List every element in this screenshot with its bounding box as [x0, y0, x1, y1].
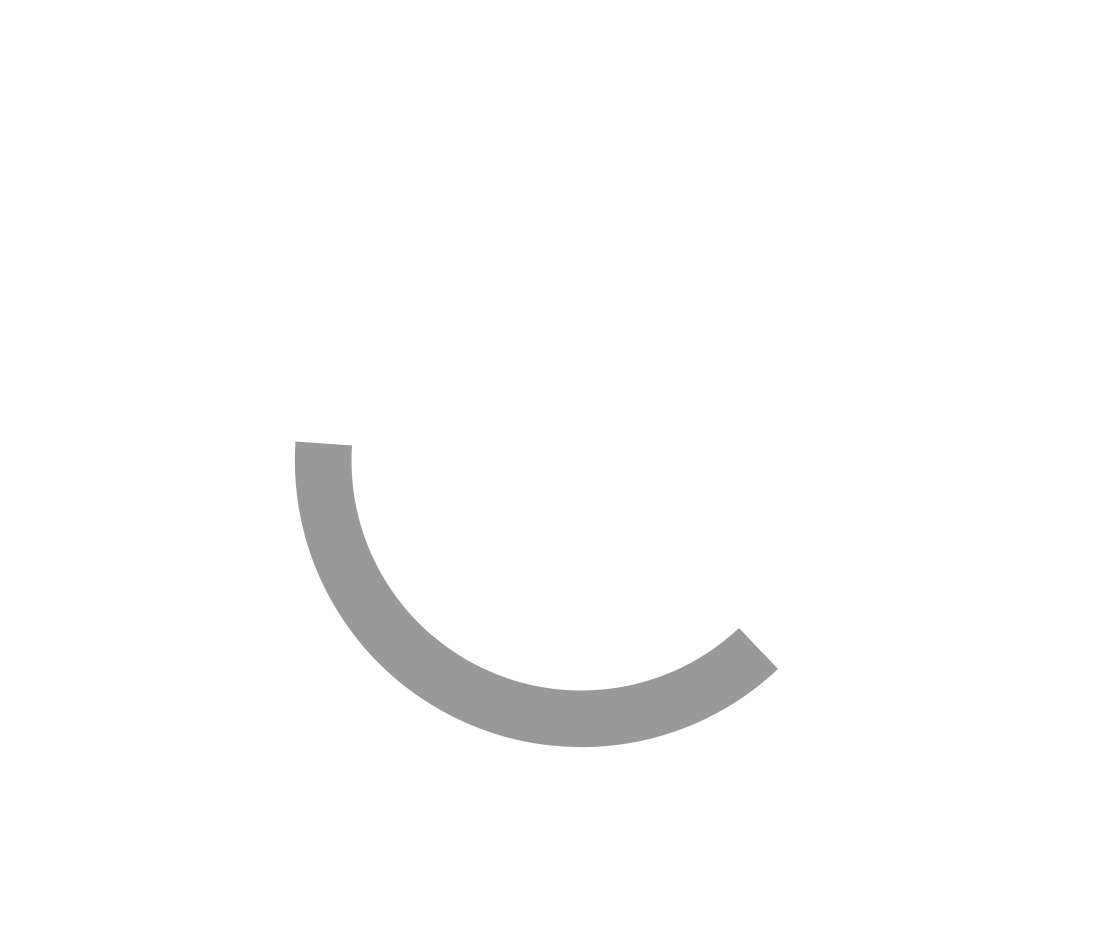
arc segment: [295, 442, 778, 747]
